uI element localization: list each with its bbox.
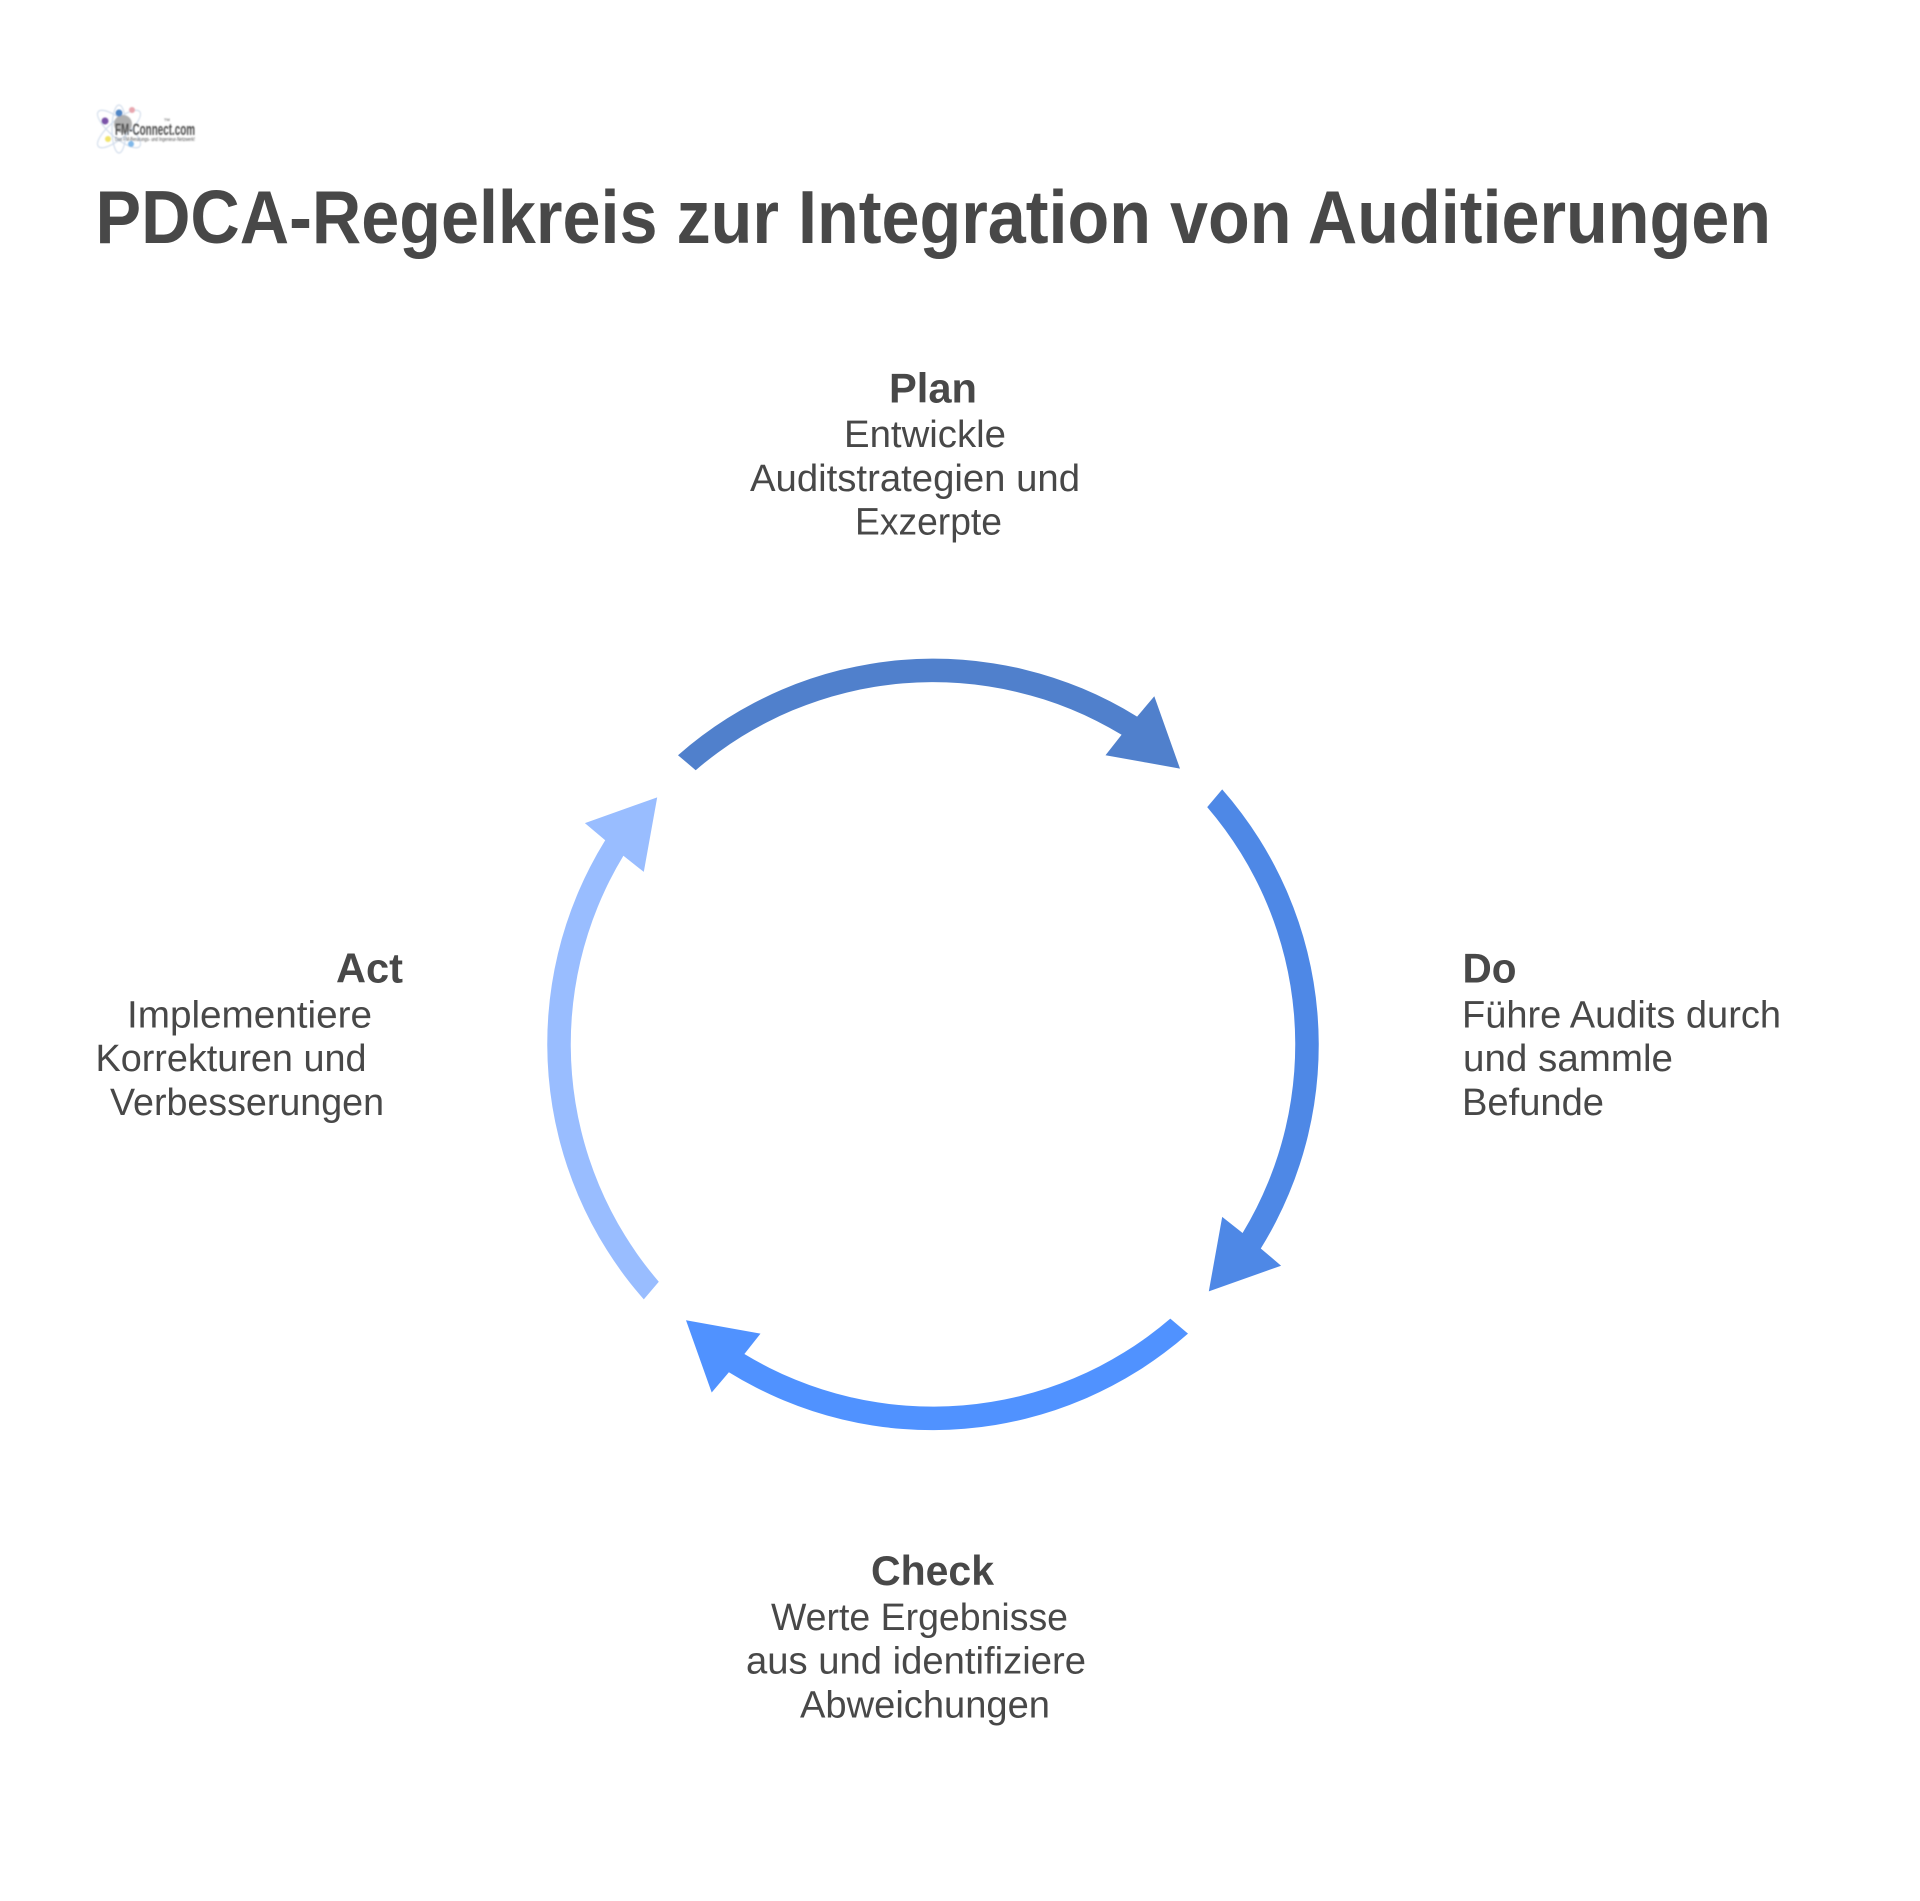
text block: Check: Werte Ergebnisse	[771, 1597, 1068, 1639]
text block: Act: Verbesserungen	[110, 1082, 384, 1124]
text block: Plan	[750, 365, 1080, 543]
text block: Act	[96, 945, 403, 1124]
text block: Check: aus und identifiziere	[746, 1640, 1086, 1682]
logo: FM-Connect: Das FM-Beratungs- und Ingenieur-Netzwerk!	[115, 137, 195, 143]
arrow: Do to Check	[1207, 789, 1319, 1291]
text block: Do: Befunde	[1462, 1082, 1604, 1124]
text block: Do: Führe Audits durch	[1462, 995, 1781, 1037]
title: PDCA-Regelkreis zur Integration von Auditierungen	[96, 175, 1771, 259]
text block: Check	[746, 1547, 1086, 1726]
text block: Act: Implementiere	[127, 995, 372, 1037]
text block: Act: Korrekturen und	[96, 1038, 366, 1080]
text block: Do	[1462, 945, 1781, 1124]
text block: Plan: Exzerpte	[855, 501, 1002, 543]
logo: FM-Connect	[93, 105, 195, 153]
text block: Plan: Plan	[889, 365, 977, 412]
arrow: Act to Plan	[547, 797, 659, 1299]
text block: Act: Act	[336, 945, 403, 992]
logo: FM-Connect: TM	[164, 117, 170, 122]
text block: Check: Check	[871, 1547, 995, 1594]
arrow: Check to Act	[686, 1319, 1188, 1430]
text block: Check: Abweichungen	[800, 1684, 1050, 1726]
logo: FM-Connect: FM-Connect.com	[115, 120, 195, 139]
text block: Plan: Entwickle	[844, 414, 1006, 456]
text block: Plan: Auditstrategien und	[750, 458, 1080, 500]
text block: Do: Do	[1462, 945, 1516, 992]
arrow: Plan to Do	[678, 659, 1180, 770]
text block: Do: und sammle	[1463, 1038, 1673, 1080]
